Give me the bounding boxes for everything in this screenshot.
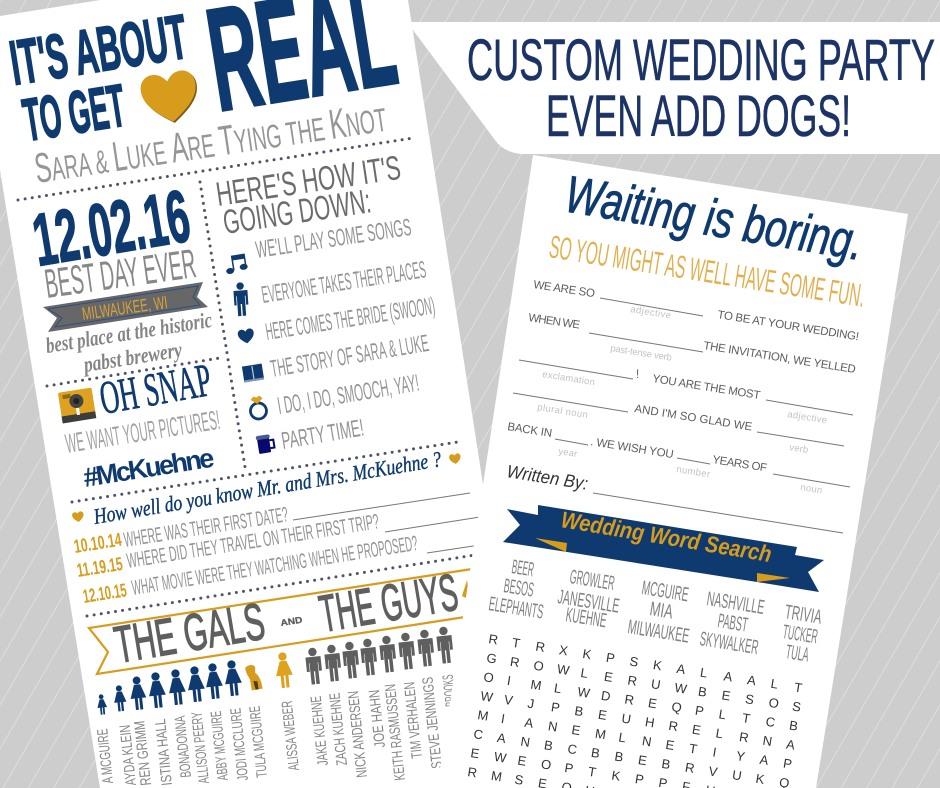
heading: THE GUYS [315, 564, 462, 644]
title: It's about to get real: TO GET [19, 72, 130, 154]
mad lib text: WHEN WE [528, 312, 581, 332]
names [94, 674, 460, 786]
names: ISTINA HALL [152, 718, 176, 786]
names: AYDA KLEIN [117, 724, 140, 786]
panel: the gals and the guys [89, 564, 472, 786]
mad lib text: past-tense verb [610, 343, 672, 364]
heading: GOING DOWN: [221, 182, 374, 242]
panel: wedding program card: WE WANT YOUR PICTURES! [63, 405, 222, 459]
word list: TULA [784, 641, 811, 667]
schedule item: PARTY TIME! [280, 415, 366, 455]
word search grid: MIANEMLNETIYAP [477, 707, 793, 772]
names: BROOKS [440, 674, 460, 707]
heading [112, 574, 458, 662]
panel: oh snap [58, 365, 220, 487]
word list: MIA [648, 598, 675, 624]
word search grid: GROWLERUWBESOS [486, 650, 802, 715]
panel: how it's going down: I DO, I DO, SMOOCH, YAY! [276, 370, 421, 420]
ribbon [89, 569, 472, 674]
venue script [46, 313, 212, 377]
mad lib text: THE INVITATION, WE YELLED [703, 340, 857, 376]
mad lib text: ! [636, 369, 639, 381]
panel: wedding program card: EVERYONE TAKES THEIR PLACES [260, 256, 428, 309]
names: KEITH RASMUSSEN [382, 683, 409, 781]
mad lib text: YEARS OF [712, 454, 768, 475]
trivia question 3 [83, 536, 474, 603]
names: JAKE KUEHNE [308, 695, 332, 766]
subtitle: Sara and Luke are tying the knot: SARA & LUKE ARE TYING THE KNOT [31, 93, 389, 192]
heading: THE GALS [110, 593, 269, 675]
names: TIM VERHALEN [401, 681, 426, 759]
trivia question 3: 12.10.15 [81, 580, 128, 608]
word list: PABST [716, 610, 749, 637]
names: JOE HAHN [366, 689, 389, 748]
names: ZACH KUEHNE [326, 692, 351, 766]
icon: small gold heart [72, 511, 84, 522]
bridesmaids icons [96, 660, 243, 715]
names: A MCGUIRE [94, 728, 117, 784]
word list: KUEHNE [564, 604, 608, 632]
names: ALLISON PEERY [189, 711, 213, 784]
ribbon: wedding word search [503, 505, 824, 592]
heading: AND [280, 615, 304, 628]
names: ABBY MCGUIRE [208, 710, 232, 781]
panel: date and venue [33, 190, 212, 377]
mad lib text: YOU ARE THE MOST [652, 373, 761, 402]
ribbon: Milwaukee, WI: MILWAUKEE, WI [81, 292, 169, 324]
icon: dog [245, 664, 263, 691]
oh snap heading: OH SNAP [96, 354, 215, 425]
date: 12.02.16 [27, 174, 195, 282]
icon: ring [248, 395, 268, 420]
mad lib text: TO BE AT YOUR WEDDING! [717, 309, 860, 343]
trivia question 2: 11.19.15 [75, 554, 124, 582]
names: TULA MCGUIRE [247, 705, 271, 778]
trivia question 3: WHAT MOVIE WERE THEY WATCHING WHEN HE PROPOSED? [130, 532, 419, 600]
mad lib text: plural noun [537, 402, 589, 421]
word list: BEER [510, 556, 535, 581]
mad lib text: AND I'M SO GLAD WE [634, 403, 753, 434]
hashtag: #McKuehne [81, 443, 216, 493]
trivia question 2 [77, 514, 478, 577]
word list: JANESVILLE [556, 586, 621, 618]
ribbon: Milwaukee, WI [43, 282, 208, 332]
trivia question 1: 10.10.14 [72, 530, 123, 558]
callout heading [467, 28, 935, 149]
names: JODI MCCLURE [227, 707, 252, 781]
trivia question 1: WHERE WAS THEIR FIRST DATE? [122, 503, 290, 552]
word list: GROWLER [568, 566, 616, 595]
icon: music notes [226, 254, 248, 274]
icon: gold woman [274, 652, 294, 689]
word list: ELEPHANTS [487, 593, 545, 624]
word search grid: OIMLWDREQPLTCB [483, 669, 799, 734]
groomsmen icons [304, 626, 454, 685]
ribbon: wedding word search: Wedding Word Search [559, 506, 774, 567]
title: It's about to get real [8, 0, 400, 141]
word list: SKYWALKER [698, 628, 760, 659]
panel: callout [410, 22, 940, 154]
venue script: pabst brewery [80, 337, 184, 377]
names: NICK ANDERSEN [345, 690, 371, 778]
heading: HERE'S HOW IT'S [214, 149, 403, 214]
names: REN GRIMM [131, 720, 155, 786]
mad lib text: year [558, 446, 578, 460]
mad lib text: . WE WISH YOU [590, 436, 674, 461]
word list: TUCKER [781, 621, 819, 648]
word list: BESOS [502, 575, 535, 602]
written by: Written By: [505, 461, 589, 494]
schedule item: WE'LL PLAY SOME SONGS [254, 214, 413, 264]
written by [505, 461, 843, 533]
panel: wedding program card [0, 0, 530, 788]
names: ALISSA WEBER [279, 700, 303, 771]
panel: date and venue: BEST DAY EVER [42, 240, 199, 307]
word list: TRIVIA [783, 601, 824, 629]
heading [216, 156, 400, 234]
word list [487, 556, 824, 667]
panel: mad libs and word search card [437, 155, 908, 788]
mad lib text: number [676, 464, 711, 480]
icon: beer mug [256, 434, 275, 454]
mad lib text [507, 279, 860, 496]
names: BONADONNA [172, 715, 195, 778]
mad lib text: WE ARE SO [533, 279, 596, 300]
mad lib text: noun [800, 482, 823, 496]
gold ribbon tip [462, 580, 468, 598]
word list: MILWAUKEE [626, 616, 691, 648]
panel: how it's going down [214, 149, 437, 455]
mad lib text: verb [789, 442, 809, 456]
panel: trivia questions [72, 446, 480, 608]
icon: person [233, 282, 249, 316]
mad lib text: exclamation [542, 369, 596, 388]
panel: wedding program card: HERE COMES THE BRIDE (SWOON) [264, 293, 437, 346]
icon: book [242, 364, 264, 382]
word search grid [467, 631, 803, 788]
word search grid: RTRXKPSKALAALT [488, 631, 803, 696]
names: STEVE JENNINGS [419, 676, 446, 769]
mad lib text: adjective [630, 304, 672, 321]
venue script: best place at the historic [44, 307, 214, 358]
icon: camera [58, 388, 96, 423]
word list: MCGUIRE [640, 577, 690, 606]
mad lib text: adjective [787, 409, 828, 426]
word list: NASHVILLE [705, 588, 766, 619]
icon: heart [238, 328, 254, 344]
icon: gold heart [140, 70, 197, 123]
trivia heading: How well do you know Mr. and Mrs. McKuehne ? [91, 446, 443, 529]
trivia question 2: WHERE DID THEY TRAVEL ON THEIR FIRST TRIP? [125, 510, 381, 573]
icon: small gold heart [449, 453, 460, 464]
mad lib text: BACK IN [507, 421, 553, 440]
panel: wedding program card: THE STORY OF SARA & LUKE [269, 330, 431, 383]
trivia question 1 [72, 493, 470, 558]
word search grid: WVJPBEUHRELRNA [480, 688, 796, 753]
